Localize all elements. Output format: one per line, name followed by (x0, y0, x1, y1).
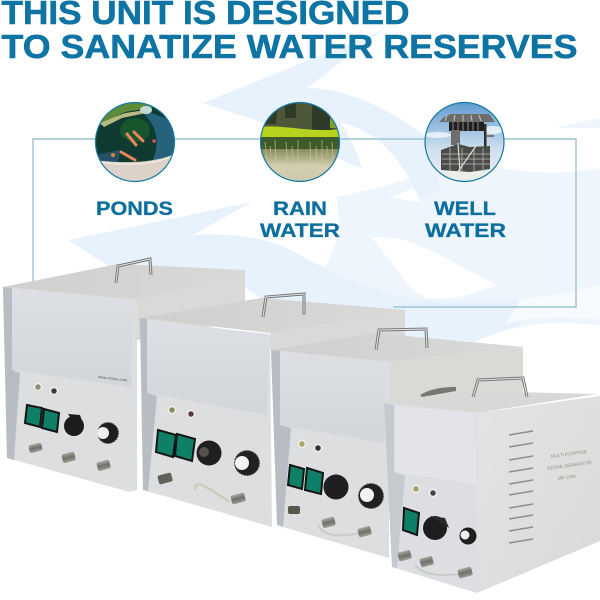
frame line around water sources (33, 139, 576, 307)
label: rain water (260, 198, 340, 242)
panel indicators (412, 486, 436, 496)
power switches (288, 465, 323, 494)
knobs (423, 516, 476, 544)
handle (473, 378, 527, 397)
power switch (403, 508, 419, 535)
label: well water (425, 198, 506, 242)
icon: ponds photo (95, 102, 176, 184)
handle (116, 259, 151, 283)
label: rain water: WATER (260, 220, 340, 242)
knobs (64, 414, 118, 444)
side label (546, 449, 593, 481)
connectors and tube (397, 550, 473, 579)
vent louvers (509, 431, 533, 543)
side label: OZONE GENERATOR (546, 460, 593, 471)
label: ponds: PONDS (96, 198, 173, 220)
ozone generator 3 (271, 329, 523, 558)
handle (376, 329, 427, 350)
title (2, 0, 578, 65)
connectors (28, 442, 111, 471)
connectors and tube (288, 506, 372, 538)
ozone generator 4 (smallest, front) (384, 378, 600, 593)
handle (263, 294, 304, 317)
label: well water: WELL (434, 198, 496, 220)
background: pale water swooshes (68, 30, 600, 350)
knobs (324, 474, 384, 508)
icon: rain water photo (260, 102, 340, 182)
connectors and tube (157, 472, 246, 505)
power switches (25, 405, 59, 432)
ozone generator 1 (largest) (3, 259, 245, 492)
label: well water: WATER (425, 220, 506, 242)
panel indicators (168, 406, 194, 418)
side label: MULTI PURPOSE (550, 449, 587, 459)
title: TO SANATIZE WATER RESERVES (2, 28, 578, 65)
knobs (196, 440, 260, 476)
icon: well water photo (425, 102, 505, 182)
panel indicators (298, 440, 322, 452)
power switches (156, 430, 195, 461)
ozone generator 2 (140, 294, 405, 527)
panel indicators (34, 384, 58, 394)
ozone generator 1 (largest): www.ozone.com (98, 374, 128, 383)
side label: MP-1000 (557, 473, 577, 481)
label: rain water: RAIN (273, 198, 327, 220)
